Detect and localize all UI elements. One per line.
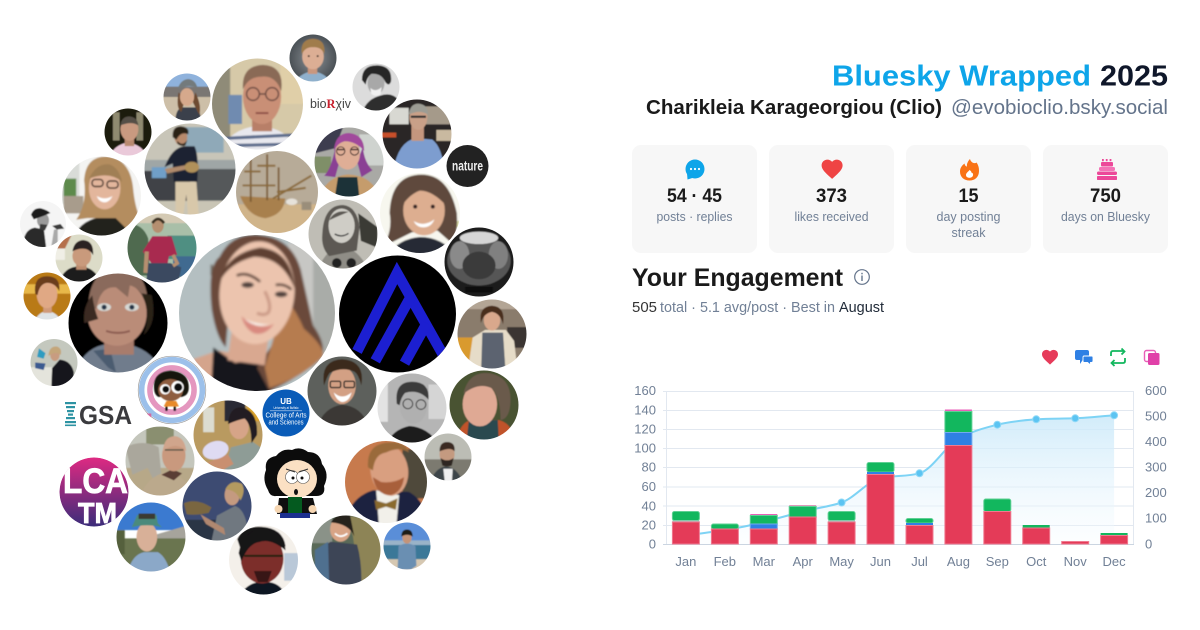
stat card: days on Bluesky: days on Bluesky (1061, 209, 1150, 224)
icon: quotes (1144, 350, 1160, 365)
avatar: man holding a fossil (182, 472, 252, 540)
avatar: woman with long hair and plants (312, 516, 380, 584)
bar: Apr (789, 505, 816, 544)
bar: Dec (1101, 533, 1128, 544)
left axis labels: 60 (642, 479, 656, 494)
avatar: wooden model ship (236, 151, 318, 233)
logo: University at Buffalo College of Arts and Sciences: University at Buffalo (274, 406, 298, 410)
logo: nature: nature (452, 158, 483, 174)
header: name and handle (646, 97, 1168, 119)
engagement summary: 505 (632, 300, 657, 316)
month labels: May (829, 554, 854, 569)
avatar: black and white woman (308, 200, 378, 268)
avatar: man in lab holding a skull (144, 124, 236, 214)
stat card: day posting streak (906, 145, 1031, 253)
icon: heart (822, 160, 843, 179)
stat card: likes received: likes received (794, 209, 868, 224)
cumulative area (686, 415, 1114, 544)
grid (663, 391, 1134, 544)
month labels: Feb (714, 554, 736, 569)
logo: nature (446, 145, 488, 187)
avatar: black and white curly-haired man (352, 64, 400, 110)
right axis labels: 0 (1145, 536, 1152, 552)
logo: cartoon in concentric rings (138, 356, 206, 424)
header: name and handle: @evobioclio.bsky.social (951, 97, 1168, 119)
logo: University at Buffalo College of Arts and Sciences: and Sciences (268, 418, 304, 426)
left axis labels (634, 383, 656, 552)
month labels: Oct (1026, 554, 1047, 569)
bar: Aug (945, 410, 972, 544)
header: name and handle: Charikleia Karageorgiou (Clio) (646, 97, 942, 119)
avatar: curly-haired man with glasses (308, 356, 376, 426)
month labels: Nov (1064, 554, 1087, 569)
stat card: day posting streak: 15 (958, 186, 979, 207)
right axis labels: 500 (1145, 408, 1167, 424)
month labels (675, 554, 1126, 569)
right axis labels: 600 (1145, 383, 1167, 398)
avatar: man in striped shirt (212, 58, 303, 150)
avatar: electron micrograph (444, 228, 514, 296)
icon: flame (960, 159, 979, 180)
engagement summary: total · 5.1 avg/post · Best in (660, 300, 835, 316)
bar: Jun (867, 462, 894, 544)
avatar: man by the sea (384, 522, 430, 570)
avatar: man with bow tie (345, 441, 427, 523)
logo: GSA: GSA (79, 400, 132, 430)
stat card: days on Bluesky: 750 (1090, 186, 1121, 207)
logo: LCA TM: TM (78, 498, 117, 530)
avatar: woman in gray top and cardigan (458, 300, 526, 368)
bar: Jan (672, 512, 699, 544)
bar: Mar (750, 514, 777, 544)
stat card: posts and replies (632, 145, 757, 253)
right axis labels: 100 (1145, 510, 1167, 526)
left axis labels: 120 (634, 422, 656, 436)
engagement summary: August (839, 300, 884, 316)
month labels: Jan (675, 554, 696, 569)
avatar: woman with dark blonde hair and red collar (450, 370, 518, 440)
heading: Your Engagement: Your Engagement (632, 264, 844, 292)
chart legend (1042, 348, 1160, 366)
icon: likes (1042, 350, 1058, 365)
month labels: Jun (870, 554, 891, 569)
right axis labels: 300 (1145, 460, 1167, 474)
bar: Feb (711, 524, 738, 544)
left axis labels: 20 (642, 518, 656, 532)
avatar: profile owner, woman with long auburn hair (179, 235, 335, 391)
bar: May (828, 512, 855, 544)
header: title: 2025 (1100, 60, 1168, 92)
logo: bioRxiv: bioRχiv (310, 97, 352, 111)
month labels: Sep (986, 554, 1009, 569)
stat card: likes received (769, 145, 894, 253)
stat card: posts and replies: posts · replies (656, 209, 733, 224)
line points (838, 412, 1118, 506)
month labels: Aug (947, 554, 970, 569)
stat card: day posting streak: streak (952, 225, 986, 240)
stat card: posts and replies: 54 · 45 (667, 186, 722, 207)
left axis labels: 0 (649, 536, 656, 552)
avatar: man with glasses and stubble close-up (229, 526, 298, 594)
avatar: cartoon character with curly black hair (264, 448, 327, 518)
logo: University at Buffalo College of Arts and Sciences: UB (280, 397, 292, 406)
stat card: day posting streak: day posting (936, 209, 1000, 224)
bar: Jul (906, 518, 933, 544)
icon: cake (1097, 159, 1117, 180)
bar: Sep (984, 499, 1011, 544)
left axis labels: 40 (642, 498, 656, 514)
avatar: woman with purple hair (314, 128, 384, 196)
logo: LCA TM (60, 458, 128, 530)
avatar: blonde woman with glasses (62, 156, 141, 236)
month labels: Mar (753, 554, 776, 569)
avatar: man close-up with glasses and dark background (68, 274, 168, 372)
left axis labels: 160 (634, 383, 656, 398)
bar: Nov (1062, 542, 1089, 544)
avatar: smiling woman with long hair (380, 173, 460, 253)
logo: University at Buffalo College of Arts and Sciences: College of Arts (266, 410, 307, 420)
avatar: man in black sweater (56, 234, 102, 282)
avatar: black and white man with cap (20, 201, 66, 247)
icon: info (855, 270, 869, 284)
stacked bars (672, 410, 1128, 544)
avatar: man on gray backdrop (290, 34, 336, 82)
left axis labels: 80 (642, 460, 656, 474)
logo: University at Buffalo College of Arts and Sciences (262, 390, 310, 436)
right axis labels: 200 (1145, 485, 1167, 500)
avatar: man in blue shirt in lab (382, 100, 452, 168)
avatar cluster (15, 30, 533, 601)
month labels: Jul (911, 554, 928, 569)
left axis labels: 140 (634, 402, 656, 418)
icon: DNA helix (65, 402, 76, 426)
avatar: blonde person working in lab (30, 339, 78, 386)
month labels: Dec (1103, 554, 1126, 569)
avatar: man with elephant (126, 426, 194, 496)
right axis labels: 400 (1145, 434, 1167, 449)
cumulative line (686, 415, 1114, 536)
bar: Oct (1023, 525, 1050, 544)
stat card: likes received: 373 (816, 186, 847, 207)
avatar: man in pink shirt (104, 108, 152, 156)
avatar: woman holding a plate (194, 400, 262, 470)
right axis labels (1145, 383, 1167, 552)
avatar: person in patterned hat on mountain (116, 502, 186, 572)
avatar: woman with gray hat in desert (164, 74, 210, 120)
chart: monthly engagement (634, 383, 1167, 569)
stat card: days on Bluesky (1043, 145, 1168, 253)
month labels: Apr (793, 554, 813, 569)
logo: LCA TM: LCA (63, 462, 128, 501)
icon: replies (1075, 350, 1093, 365)
avatar: smiling man on orange-brown background (24, 272, 70, 320)
avatar: black and white man with glasses (378, 374, 446, 442)
logo: blue chevrons on black (339, 256, 456, 372)
header: title: Bluesky Wrapped (832, 60, 1091, 92)
avatar: man with beard outdoors (424, 434, 472, 480)
avatar: man in red shirt against mural (128, 214, 196, 282)
icon: reposts (1111, 348, 1125, 366)
left axis labels: 100 (634, 440, 656, 456)
icon: chat bubble (686, 160, 704, 180)
